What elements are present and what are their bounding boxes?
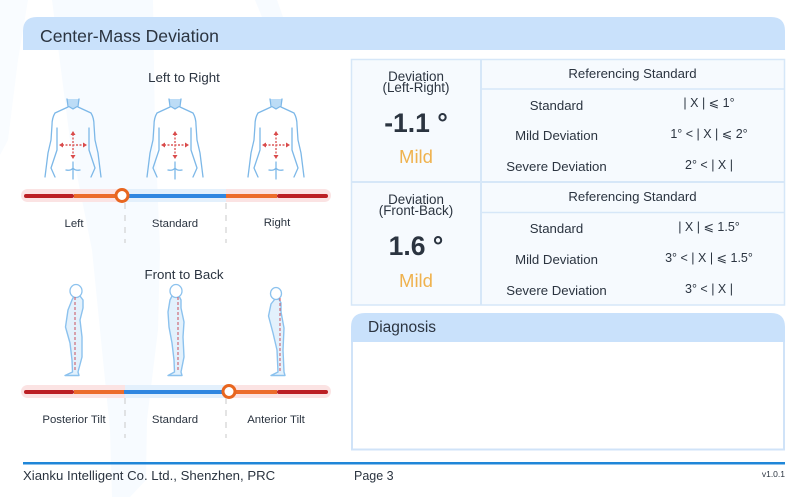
standards: front-back: | X | ⩽ 1.5°: [678, 220, 740, 234]
section header: Center-Mass Deviation: [23, 17, 785, 50]
heading: Left to Right: Left to Right: [148, 70, 220, 85]
standards: front-back: Severe Deviation: [506, 283, 607, 298]
figure: side standard: [168, 284, 184, 376]
standards: left-right: Severe Deviation: [506, 159, 607, 174]
figure: torso standard: [147, 99, 203, 179]
standards: front-back: Mild Deviation: [515, 252, 598, 267]
slider: left to right: [21, 189, 331, 202]
labels: left to right scale: Standard: [152, 218, 198, 230]
standards: left-right: 1° < | X | ⩽ 2°: [670, 127, 748, 141]
figure: torso left: [45, 99, 101, 179]
cell: front-back deviation: 1.6 °: [389, 231, 443, 261]
panel: front to back: [21, 267, 331, 438]
figure: side anterior tilt: [268, 288, 285, 376]
cell: front-back deviation: Mild: [399, 270, 433, 291]
standards: front-back: [506, 189, 753, 298]
figure: side posterior tilt: [65, 284, 83, 376]
labels: front to back scale: Posterior Tilt: [42, 414, 106, 426]
heading: Front to Back: Front to Back: [144, 267, 224, 282]
labels: left to right scale: [64, 217, 291, 230]
standards: front-back: 3° < | X | ⩽ 1.5°: [665, 251, 753, 265]
footer: Xianku Intelligent Co. Ltd., Shenzhen, PRC: [23, 468, 276, 483]
labels: front to back scale: Anterior Tilt: [247, 414, 306, 426]
footer: Page 3: [354, 469, 394, 483]
labels: left to right scale: Right: [264, 217, 291, 229]
standards: left-right: Standard: [530, 98, 583, 113]
footer: v1.0.1: [762, 469, 785, 479]
standards: left-right: | X | ⩽ 1°: [683, 96, 735, 110]
labels: left to right scale: Left: [64, 218, 84, 230]
panel: left to right: [21, 70, 331, 243]
marker: [116, 190, 128, 202]
standards: left-right: [506, 66, 748, 174]
cell: front-back deviation: (Front-Back): [379, 203, 453, 218]
standards: left-right: Referencing Standard: [568, 66, 697, 81]
cell: left-right deviation: Mild: [399, 146, 433, 167]
standards: front-back: 3° < | X |: [685, 282, 733, 296]
figure: torso right: [248, 99, 304, 179]
heading: Diagnosis: Diagnosis: [368, 319, 436, 336]
panel: diagnosis: [351, 313, 785, 450]
cell: front-back deviation: Deviation: [388, 192, 444, 207]
table: deviation values and referencing standards: [351, 59, 785, 305]
labels: front to back scale: [42, 414, 306, 426]
standards: front-back: Referencing Standard: [568, 189, 697, 204]
cell: left-right deviation: Deviation: [388, 69, 444, 84]
slider: front to back: [21, 385, 331, 398]
standards: left-right: 2° < | X |: [685, 158, 733, 172]
section header: Center-Mass Deviation: Center-Mass Deviation: [40, 26, 219, 46]
cell: left-right deviation: -1.1 °: [384, 108, 448, 138]
cell: left-right deviation: [383, 69, 449, 167]
standards: front-back: Standard: [530, 221, 583, 236]
labels: front to back scale: Standard: [152, 414, 198, 426]
cell: left-right deviation: (Left-Right): [383, 80, 449, 95]
cell: front-back deviation: [379, 192, 453, 291]
footer: [23, 462, 785, 483]
marker: [223, 386, 235, 398]
standards: left-right: Mild Deviation: [515, 128, 598, 143]
